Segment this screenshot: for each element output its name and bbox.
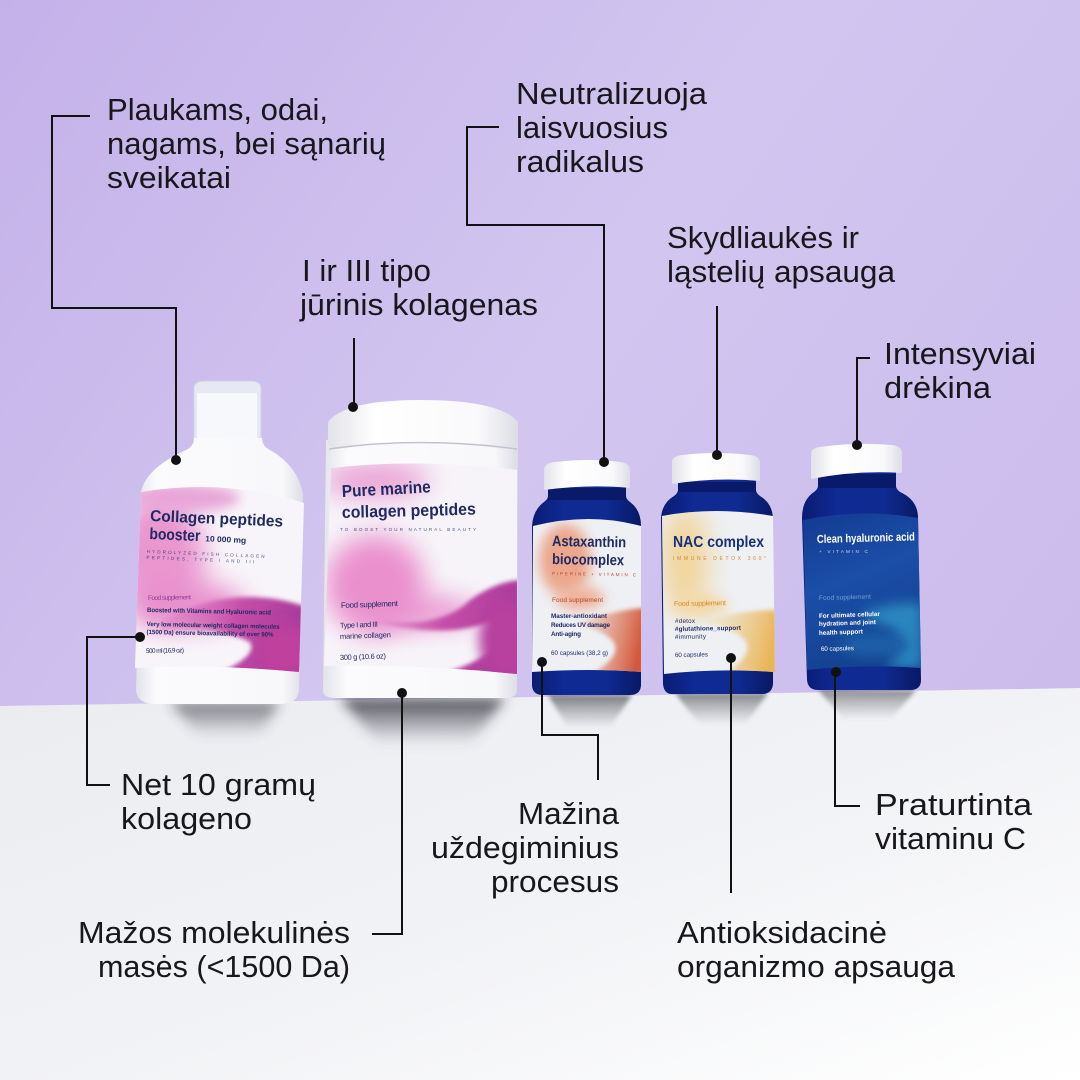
product: NAC complex bottle: #glutathione_support <box>675 625 742 633</box>
product: clean hyaluronic acid bottle: Food supplement <box>819 594 871 602</box>
product: pure marine collagen jar: Food supplement <box>341 599 399 610</box>
product: clean hyaluronic acid bottle <box>800 444 925 690</box>
product: astaxanthin biocomplex bottle: biocomplex <box>552 551 625 569</box>
product: clean hyaluronic acid bottle: For ultimate cellular <box>819 611 881 620</box>
connector line <box>852 358 870 450</box>
text: callout copy: laisvuosius <box>516 110 668 145</box>
connector line <box>52 116 181 465</box>
bottle text: 10 000 mg <box>205 534 247 545</box>
text: callout copy: nagams, bei sąnarių <box>107 126 386 161</box>
text: callout copy: Plaukams, odai, <box>107 92 328 127</box>
connector line <box>537 657 598 780</box>
product: collagen peptides booster bottle: (1500 Da) ensure bioavailability of over 90% <box>146 629 274 639</box>
jar body <box>323 440 518 698</box>
callout: antioxidant protection <box>677 653 956 984</box>
callout: thyroid and cell protection <box>667 220 896 460</box>
white shelf <box>0 688 1080 1080</box>
connector line <box>87 632 145 785</box>
product: pure marine collagen jar: TO BOOST YOUR NATURAL BEAUTY <box>340 527 476 532</box>
text: callout copy: kolageno <box>121 801 252 836</box>
product: astaxanthin biocomplex bottle: Food supplement <box>552 597 603 604</box>
product: pure marine collagen jar: marine collagen <box>340 630 391 641</box>
bottle cap <box>672 453 760 484</box>
bottle text: Astaxanthin <box>552 533 626 551</box>
text: callout copy: jūrinis kolagenas <box>299 287 538 322</box>
bottle label <box>803 514 921 670</box>
text: callout copy: uždegiminius <box>431 830 619 865</box>
bottle text: Clean hyaluronic acid <box>817 531 915 546</box>
text: callout copy: procesus <box>491 864 619 899</box>
text: callout copy: vitaminu C <box>875 821 1026 856</box>
product: clean hyaluronic acid bottle: 60 capsules <box>821 645 854 653</box>
text: callout copy: Intensyviai <box>884 336 1036 371</box>
product: collagen peptides booster bottle <box>135 380 304 704</box>
connector line <box>467 127 609 467</box>
jar text: Pure marine <box>341 477 431 501</box>
product: astaxanthin biocomplex bottle: Anti-aging <box>551 631 581 638</box>
bottle cap <box>194 381 261 440</box>
callout: type I and III marine collagen <box>299 253 538 412</box>
product: pure marine collagen jar: 300 g (10.6 oz) <box>340 651 387 662</box>
jar label <box>324 464 517 674</box>
product: astaxanthin biocomplex bottle: Master-antioxidant <box>551 613 608 620</box>
text: callout copy: sveikatai <box>107 160 231 195</box>
bottle text: HYDROLYZED FISH COLLAGEN <box>147 549 265 559</box>
product: clean hyaluronic acid bottle: + VITAMIN C <box>819 549 869 555</box>
product: astaxanthin biocomplex bottle: Reduces UV damage <box>551 622 610 629</box>
product: NAC complex bottle: #detox <box>675 618 696 625</box>
bottle text <box>146 508 283 566</box>
text: callout copy: Antioksidacinė <box>677 915 887 950</box>
product shadows <box>170 690 916 745</box>
bottle label <box>532 519 641 672</box>
bottle body <box>661 474 773 694</box>
product: NAC complex bottle: 60 capsules <box>675 651 708 659</box>
product: collagen peptides booster bottle: 500 ml (16.9 oz) <box>146 647 184 655</box>
bottle label <box>662 511 775 674</box>
text: callout copy: Mažos molekulinės <box>78 915 350 950</box>
bottle text: booster <box>149 526 201 545</box>
product: NAC complex bottle: Food supplement <box>674 600 726 608</box>
text: callout copy: ląstelių apsauga <box>667 254 896 289</box>
text: callout copy: organizmo apsauga <box>677 949 956 984</box>
text: callout copy: radikalus <box>516 144 644 179</box>
product: collagen peptides booster bottle: Boosted with Vitamins and Hyaluronic acid <box>147 607 271 617</box>
bottle text: Collagen peptides <box>150 508 283 531</box>
text: callout copy: Praturtinta <box>875 787 1033 822</box>
product: pure marine collagen jar: Type I and III <box>340 620 378 630</box>
connector line <box>831 667 860 806</box>
bottle body <box>136 438 303 704</box>
text: callout copy: Neutralizuoja <box>516 76 708 111</box>
product: NAC complex bottle <box>658 453 778 694</box>
text: callout copy: I ir III tipo <box>302 253 431 288</box>
text: callout copy: Mažina <box>518 796 620 831</box>
text: callout copy: Net 10 gramų <box>121 767 316 802</box>
connector line <box>726 653 736 893</box>
product: pure marine collagen jar <box>320 400 531 698</box>
callout: reduces inflammation <box>431 657 620 899</box>
product: collagen peptides booster bottle: Food supplement <box>148 594 191 602</box>
callout: neutralises free radicals <box>467 76 708 467</box>
callout: hair, skin, nails and joints <box>52 92 386 465</box>
callout: low molecular mass <box>78 688 407 984</box>
bottle body <box>802 468 921 690</box>
jar lid <box>328 400 518 449</box>
bottle text: PEPTIDES, TYPE I AND III <box>146 555 254 564</box>
bottle cap <box>544 460 630 490</box>
product: NAC complex bottle: #immunity <box>675 633 707 641</box>
product: NAC complex bottle: IMMUNE DETOX 360° <box>673 556 766 562</box>
product: clean hyaluronic acid bottle: health support <box>819 628 864 637</box>
product: astaxanthin biocomplex bottle <box>530 460 645 695</box>
product: pure marine collagen jar: collagen peptides <box>342 499 476 522</box>
callout: 10 grams of collagen <box>87 632 316 836</box>
callout: enriched with vitamin C <box>831 667 1033 856</box>
product: collagen peptides booster bottle: Very low molecular weight collagen molecules <box>147 621 280 631</box>
connector line <box>372 688 407 934</box>
bottle body <box>532 480 641 695</box>
callout: intensively hydrates <box>852 336 1036 450</box>
text: callout copy: masės (<1500 Da) <box>98 949 350 984</box>
text: callout copy: drėkina <box>884 370 992 405</box>
product: clean hyaluronic acid bottle: hydration and joint <box>819 619 877 628</box>
product: astaxanthin biocomplex bottle: PIPERINE + VITAMIN C <box>552 571 637 577</box>
bottle label <box>135 487 304 672</box>
connector line <box>348 338 358 412</box>
bottle text: NAC complex <box>673 534 764 551</box>
text: callout copy: Skydliaukės ir <box>667 220 859 255</box>
bottle cap <box>811 444 902 479</box>
connector line <box>712 306 722 460</box>
product: astaxanthin biocomplex bottle: 60 capsules (38,2 g) <box>551 650 608 657</box>
